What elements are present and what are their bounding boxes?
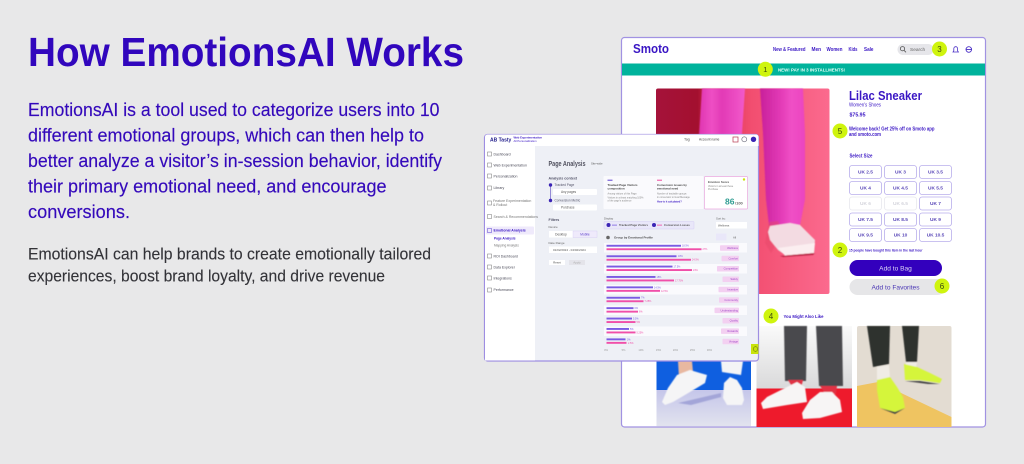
sidebar navigation: Mapping Analysis — [494, 244, 519, 248]
chart axis: 25% — [690, 348, 696, 352]
numbered marker 3 — [932, 42, 947, 56]
Smoto logo: Smoto — [633, 42, 669, 56]
size selector: Select Size — [850, 154, 873, 160]
size selector: UK 2.5 — [858, 170, 873, 176]
bar values: 15% — [656, 276, 662, 279]
search field — [898, 44, 934, 55]
sidebar navigation: Page Analysis — [494, 236, 516, 240]
sidebar navigation — [485, 146, 538, 360]
size selector: UK 7.5 — [858, 217, 873, 223]
product photo: neon green sneakers — [857, 326, 952, 427]
panel: AB Tasty dashboard — [484, 134, 758, 361]
summary cards: Visitors in at least matching 100% — [608, 196, 644, 200]
add to bag button — [850, 260, 942, 276]
text block: benefits — [28, 244, 431, 286]
bar values: 3% — [627, 338, 631, 341]
size selector: UK 3.5 — [928, 170, 943, 176]
chart axis: 5% — [622, 348, 626, 352]
sidebar navigation: Performance — [494, 288, 514, 292]
analysis context form: Analysis context — [548, 176, 578, 180]
panel: Smoto storefront — [622, 38, 986, 427]
bar values: 5.5% — [633, 318, 639, 320]
sidebar navigation: Dashboard — [494, 152, 511, 156]
bar chart: emotional profile: Comfort — [728, 256, 738, 260]
display toggles: Wellness — [718, 223, 730, 227]
sidebar navigation: Feature Experimentation — [493, 199, 531, 203]
bar chart: emotional profile: 24% — [693, 269, 699, 272]
size selector: UK 10.5 — [927, 233, 945, 239]
size selector: UK 5.5 — [928, 186, 943, 192]
size selector: UK 6.5 — [893, 201, 908, 207]
text block: description: their primary emotional need, and encourage — [28, 176, 386, 197]
size selector: UK 4.5 — [893, 186, 908, 192]
bar chart: emotional profile: Rewards — [727, 329, 739, 333]
bar values: 18.5% — [682, 245, 690, 248]
text block: description: conversions. — [28, 201, 130, 222]
numbered marker 1 — [758, 62, 773, 77]
bar values — [627, 245, 690, 341]
filters form: Mobile — [580, 232, 590, 236]
personalized welcome message: Welcome back! Get 25% off on Smoto app — [849, 126, 934, 132]
text block: description — [28, 99, 443, 222]
emotion tags — [714, 245, 739, 344]
sidebar navigation: Search & Recommendations — [494, 215, 538, 219]
sidebar navigation: Web Experimentation — [494, 164, 527, 168]
dashboard header — [485, 134, 758, 146]
bar chart: emotional profile: 6% — [639, 311, 643, 314]
bar values: 14.5% — [654, 286, 662, 289]
summary cards — [604, 176, 704, 209]
bar chart: emotional profile: 12.5% — [661, 290, 669, 293]
page heading: Page Analysis — [548, 159, 586, 168]
sidebar navigation: Integrations — [494, 277, 512, 281]
numbered marker 4: 4 — [769, 312, 774, 321]
size selector: UK 4 — [860, 186, 871, 192]
numbered marker 1: 1 — [763, 65, 767, 74]
bar chart: emotional profile — [604, 234, 747, 352]
promo banner: NEW! PAY IN 3 INSTALLMENTS! — [778, 67, 845, 72]
bar chart: emotional profile: Understanding — [721, 308, 739, 312]
bar chart: emotional profile: Community — [724, 298, 739, 302]
text block: benefits: experiences, boost brand loyalty, and drive revenue — [28, 267, 385, 286]
summary cards: How is it calculated? — [657, 200, 682, 204]
filters form: Reset — [553, 260, 561, 264]
bar chart: emotional profile: 17.75% — [675, 279, 684, 282]
search field: Search — [910, 47, 926, 53]
chart axis: 20% — [673, 348, 679, 352]
title: How EmotionsAI Works — [28, 29, 464, 75]
personalized welcome message — [849, 126, 934, 138]
add to favorites button — [850, 279, 946, 295]
size selector: UK 10 — [894, 233, 908, 239]
bar values: 5% — [630, 328, 634, 331]
navigation: Sale — [864, 47, 874, 53]
chart axis: 30% — [707, 348, 713, 352]
conversion bars — [606, 248, 702, 344]
size selector: UK 9 — [930, 217, 941, 223]
bar values: 17.5% — [674, 266, 681, 268]
visitors bars — [606, 245, 681, 340]
summary cards: Tracked Page Visitors — [608, 183, 638, 187]
bar chart: emotional profile: Quality — [730, 319, 739, 323]
display toggles: Display — [604, 216, 614, 220]
bar chart: emotional profile: All — [733, 236, 736, 240]
filters form: Filters — [548, 218, 559, 222]
bar values: 6% — [634, 307, 639, 310]
size selector: UK 8.5 — [893, 217, 908, 223]
display toggles: Sort by: — [716, 216, 726, 220]
text block: description: different emotional groups, which can then help to — [28, 125, 424, 146]
emotion score card: /100 — [735, 200, 744, 206]
sidebar navigation: & Rollout — [493, 203, 507, 207]
dashboard header: Tag — [684, 138, 690, 142]
dashboard header: AB Tasty — [490, 138, 512, 144]
bar chart: emotional profile: Wellness — [727, 246, 739, 250]
filters form: Desktop — [555, 232, 567, 236]
display toggles — [604, 216, 747, 229]
emotion score card: Visitors in at least these — [708, 185, 734, 188]
product photo: white sneakers on red — [756, 326, 852, 427]
chart axis — [604, 348, 713, 352]
promo banner — [622, 64, 985, 76]
emotion score card: Emotion Score — [708, 180, 730, 184]
size selector: UK 7 — [930, 201, 941, 207]
navigation: New & Featured — [773, 47, 806, 53]
bar chart: emotional profile: 2.5% — [628, 342, 634, 345]
bar chart: emotional profile: Group by Emotional Profile — [614, 236, 653, 240]
display toggles: Tracked Page Visitors — [619, 223, 648, 227]
numbered marker 2 — [832, 242, 848, 258]
filters form: Date Range — [548, 241, 565, 245]
numbered marker 6 — [934, 278, 950, 294]
numbered marker 6: 6 — [940, 282, 945, 291]
display toggles: Conversion Losses — [664, 223, 690, 227]
size selector: UK 6 — [860, 201, 871, 207]
text block: benefits: EmotionsAI can help brands to create emotionally tailored — [28, 244, 431, 263]
analysis context form: Purchase — [561, 206, 575, 210]
emotion score card: Purchase — [708, 188, 719, 191]
bar chart: emotional profile: 5% — [636, 321, 641, 324]
bar values: 18% — [678, 255, 684, 258]
sidebar navigation: ROI Dashboard — [494, 254, 518, 258]
page heading: Site-wide — [591, 162, 603, 166]
analysis context form — [548, 176, 597, 210]
analysis context form: Any pages — [561, 190, 576, 194]
size selector — [850, 154, 952, 242]
add to bag button: Add to Bag — [879, 266, 912, 272]
numbered marker 4 — [764, 308, 778, 324]
numbered marker 5: 5 — [838, 127, 843, 136]
product info — [849, 88, 922, 118]
product photo: white sneakers on blue — [656, 326, 751, 426]
analysis context form: Tracked Page — [554, 183, 574, 187]
bar chart: emotional profile: Competition — [724, 267, 739, 271]
summary cards: composition — [608, 186, 625, 190]
navigation: Men — [812, 47, 821, 53]
text block: description: better analyze a visitor’s in-session behavior, identify — [28, 150, 443, 171]
product photo: pink trousers and sneaker — [656, 88, 830, 294]
product info: $75.95 — [850, 112, 866, 118]
size selector: UK 3 — [895, 170, 906, 176]
emotion score card: 86 — [725, 196, 735, 206]
filters form — [548, 218, 597, 265]
navigation — [773, 47, 874, 53]
social proof message: 15 people have bought this item in the last hour — [849, 248, 923, 252]
product info: Lilac Sneaker — [849, 88, 922, 103]
numbered marker 5 — [832, 124, 848, 138]
summary cards: in conversion to Goal Message — [657, 196, 690, 199]
numbered marker on dashboard — [751, 344, 758, 354]
bar chart: emotional profile: Inventive — [727, 288, 738, 292]
filters form: Device — [548, 225, 558, 229]
summary cards: emotional need — [657, 186, 678, 190]
navigation: Women — [826, 47, 842, 53]
bar chart: emotional profile: Vintage — [729, 340, 738, 344]
chart axis: 15% — [656, 348, 662, 352]
sidebar navigation: Personalization — [494, 175, 517, 179]
summary cards: of the page's audience — [608, 200, 632, 202]
bar chart: emotional profile: 27% — [702, 248, 708, 251]
add to favorites button: Add to Favorites — [871, 284, 920, 292]
emotion score card — [704, 176, 748, 209]
dashboard header: Web Experimentation — [514, 136, 542, 140]
navigation: Kids — [848, 47, 858, 53]
numbered marker 2: 2 — [838, 246, 843, 255]
dashboard header: Account name — [699, 138, 720, 142]
sidebar navigation: Library — [494, 186, 504, 190]
size selector: UK 9.5 — [858, 233, 873, 239]
icon: shopping bag — [966, 47, 972, 52]
summary cards: Number of trackable groups — [657, 192, 687, 196]
product info: Women's Shoes — [849, 102, 881, 108]
icon: bell — [953, 47, 958, 52]
dashboard header: All Personalization — [514, 139, 537, 143]
chart axis: 0% — [604, 348, 609, 352]
summary cards: Conversion issues by — [657, 183, 687, 187]
numbered marker 3: 3 — [937, 45, 942, 54]
bar chart: emotional profile: 24.5% — [692, 259, 700, 262]
bar chart: emotional profile: Safety — [730, 277, 739, 281]
filters form: 01/02/2024 - 04/02/2024 — [553, 248, 586, 252]
bar chart: emotional profile: 5.25% — [636, 331, 644, 334]
text block: description: EmotionsAI is a tool used to categorize users into 10 — [28, 99, 440, 120]
summary cards: Among visitors of this Page: — [608, 192, 637, 196]
bar values: 7% — [641, 297, 645, 300]
sidebar navigation: Emotional Analysis — [494, 229, 526, 233]
recommendations heading: You Might Also Like — [784, 314, 824, 320]
filters form: Apply — [573, 260, 581, 264]
personalized welcome message: and smoto.com — [849, 132, 881, 138]
analysis context form: Conversion Metric — [554, 198, 581, 202]
bar chart: emotional profile: 7.25% — [644, 300, 652, 303]
chart axis: 10% — [638, 348, 644, 352]
sidebar navigation: Data Explorer — [494, 266, 516, 270]
